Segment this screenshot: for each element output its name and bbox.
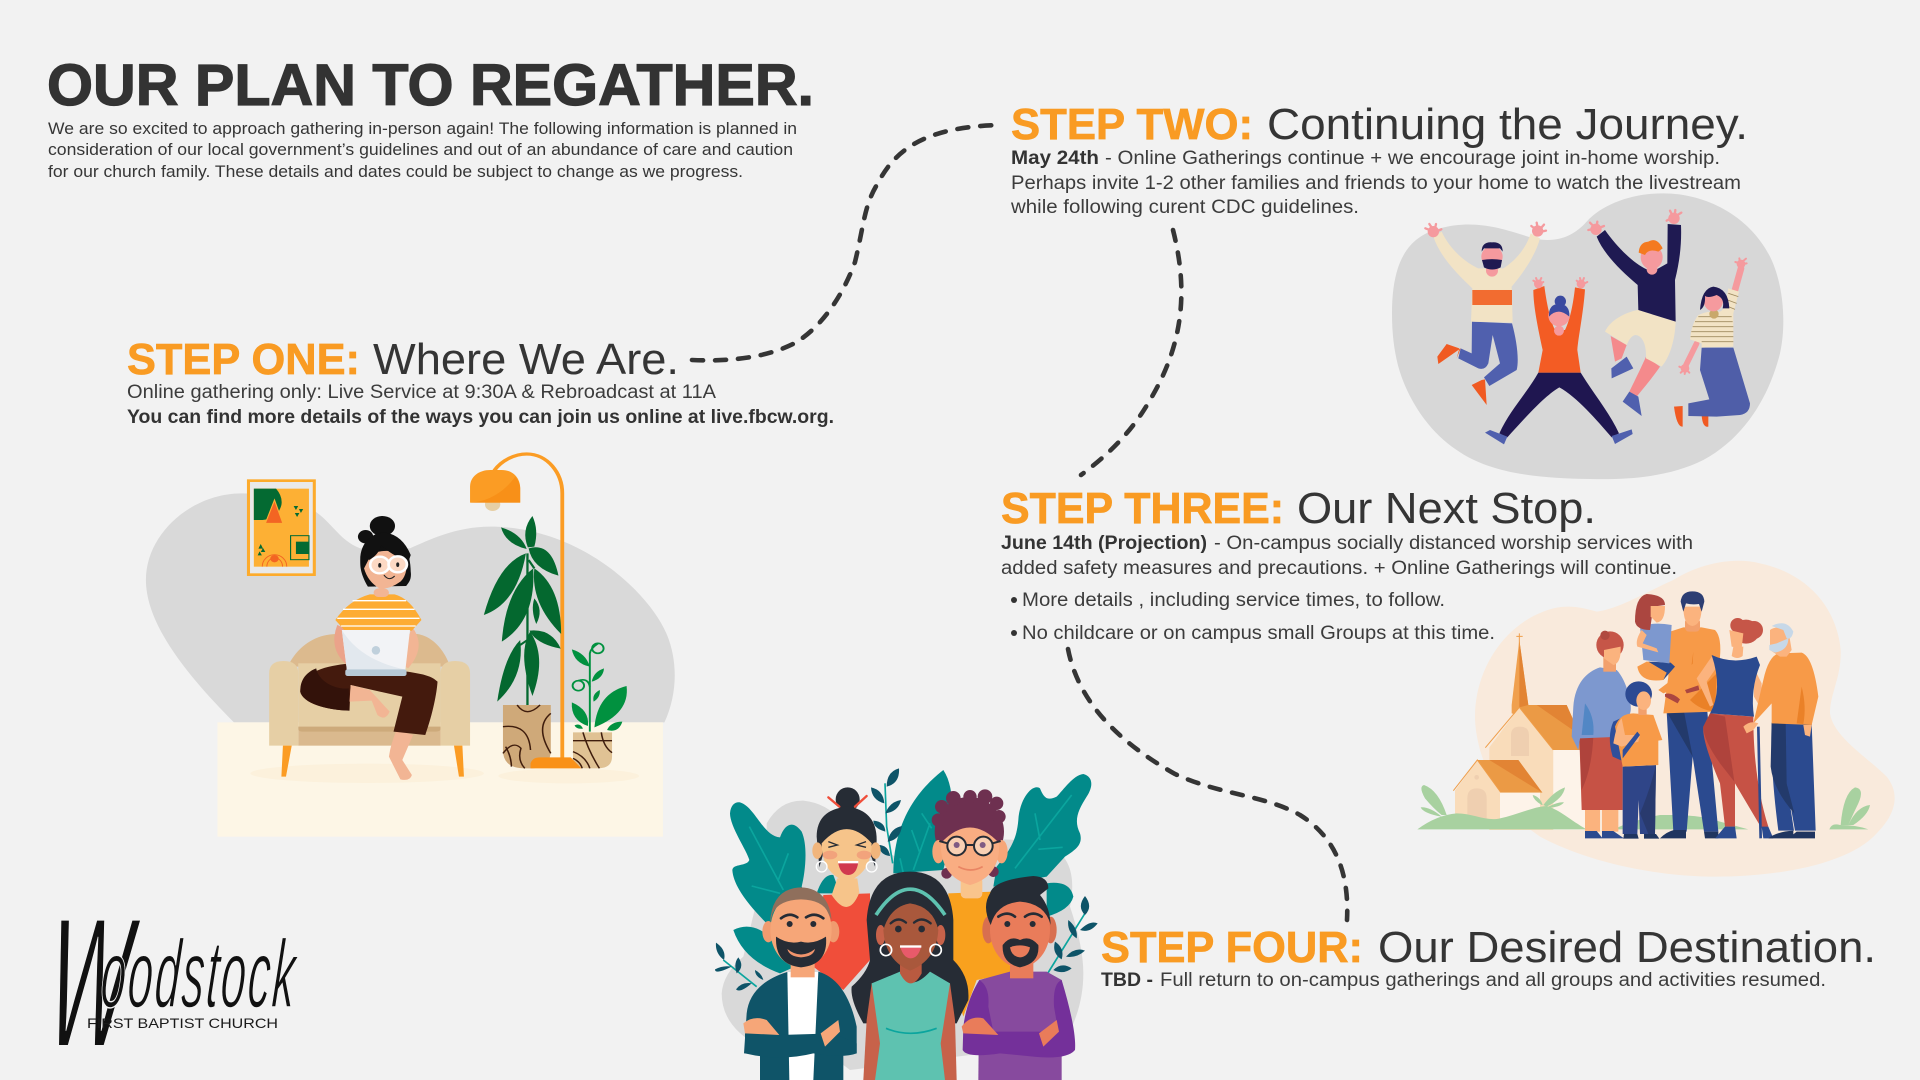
intro text: We are so excited to approach gathering in-person again! The following information is planned in	[48, 119, 797, 138]
grandfather with cane	[1743, 623, 1818, 838]
step three text: June 14th (Projection)	[1001, 533, 1207, 554]
wall picture	[247, 479, 316, 576]
step four text: Full return to on-campus gatherings and all groups and activities resumed.	[1160, 970, 1826, 991]
illustration: group of five people with leaves	[715, 768, 1098, 1080]
pot two	[573, 732, 612, 768]
step one heading	[127, 335, 679, 384]
child in father's arms	[1635, 594, 1718, 703]
step three text: More details , including service times, to follow.	[1022, 590, 1445, 611]
laptop	[342, 630, 410, 676]
step four heading: Our Desired Destination.	[1378, 923, 1876, 972]
intro text: for our church family. These details and dates could be subject to change as we progress.	[48, 162, 743, 181]
pot one	[503, 705, 551, 768]
illustration: woman on laptop in living room	[146, 454, 675, 837]
jumper: woman in stripes	[1674, 258, 1750, 427]
church	[1453, 633, 1587, 830]
step four heading	[1101, 923, 1876, 972]
big plant	[484, 516, 561, 705]
logo script wordmark: W	[43, 882, 144, 1080]
step one heading: STEP ONE:	[127, 335, 360, 384]
dashed path: step three to step four	[1068, 649, 1347, 920]
title: OUR PLAN TO REGATHER.	[47, 53, 814, 118]
grey blob	[1392, 193, 1783, 479]
step two text: Perhaps invite 1-2 other families and friends to your home to watch the livestream	[1011, 173, 1741, 194]
dashed path: step two to step three	[1081, 230, 1181, 475]
logo script wordmark: oodstock	[98, 920, 301, 1027]
illustration: four people jumping	[1392, 193, 1783, 479]
step two heading	[1011, 100, 1748, 149]
logo subtitle: FIRST BAPTIST CHURCH	[87, 1015, 278, 1031]
man with glasses in yellow	[932, 789, 1012, 1017]
woman in green dress	[851, 872, 968, 1080]
man in teal jacket	[743, 887, 857, 1080]
woman	[300, 516, 438, 780]
lamp base	[531, 757, 581, 768]
woman in red top	[812, 787, 881, 990]
step one text: You can find more details of the ways you can join us online at live.fbcw.org.	[127, 407, 834, 428]
floor	[217, 722, 663, 837]
step two heading: Continuing the Journey.	[1267, 100, 1748, 149]
intro text	[48, 119, 797, 181]
step two text: while following curent CDC guidelines.	[1010, 197, 1359, 218]
father	[1660, 591, 1720, 838]
boy with backpack	[1610, 681, 1662, 839]
step two text: - Online Gatherings continue + we encourage joint in-home worship.	[1105, 148, 1720, 169]
step four text: TBD -	[1101, 970, 1153, 991]
step one text	[127, 382, 834, 428]
logo: Woodstock First Baptist Church	[43, 882, 303, 1080]
step three text	[1001, 533, 1693, 644]
mother	[1697, 618, 1773, 838]
man in purple	[962, 876, 1075, 1080]
floor lamp	[470, 454, 562, 760]
leaves	[730, 770, 1091, 973]
small plant	[572, 643, 627, 732]
step three text: added safety measures and precautions. + Online Gatherings will continue.	[1001, 558, 1677, 579]
intro text: consideration of our local government’s guidelines and out of an abundance of care and caution	[48, 140, 793, 159]
step one heading: Where We Are.	[373, 335, 679, 384]
step four heading: STEP FOUR:	[1101, 923, 1363, 972]
background blob	[146, 493, 675, 722]
illustration: family and church	[1417, 561, 1895, 877]
step one text: Online gathering only: Live Service at 9:30A & Rebroadcast at 11A	[127, 382, 716, 403]
step three text: No childcare or on campus small Groups at this time.	[1022, 623, 1495, 644]
step three text: - On-campus socially distanced worship services with	[1214, 533, 1693, 554]
armchair	[269, 634, 470, 777]
woman with skirt	[1572, 631, 1631, 838]
peach blob	[1475, 561, 1895, 877]
step two text: May 24th	[1011, 148, 1099, 169]
sprigs	[715, 768, 1098, 990]
step three heading	[1001, 484, 1596, 533]
jumper: woman in orange	[1485, 278, 1633, 444]
step three heading: Our Next Stop.	[1297, 484, 1596, 533]
jumper: red-haired man	[1588, 210, 1681, 416]
grass and plants	[1417, 785, 1870, 829]
step two text	[1010, 148, 1741, 218]
jumper: bearded man	[1425, 223, 1546, 405]
grey blob	[722, 801, 1083, 1070]
step three heading: STEP THREE:	[1001, 484, 1284, 533]
step two heading: STEP TWO:	[1011, 100, 1253, 149]
dashed path: step one to step two	[692, 125, 1003, 360]
